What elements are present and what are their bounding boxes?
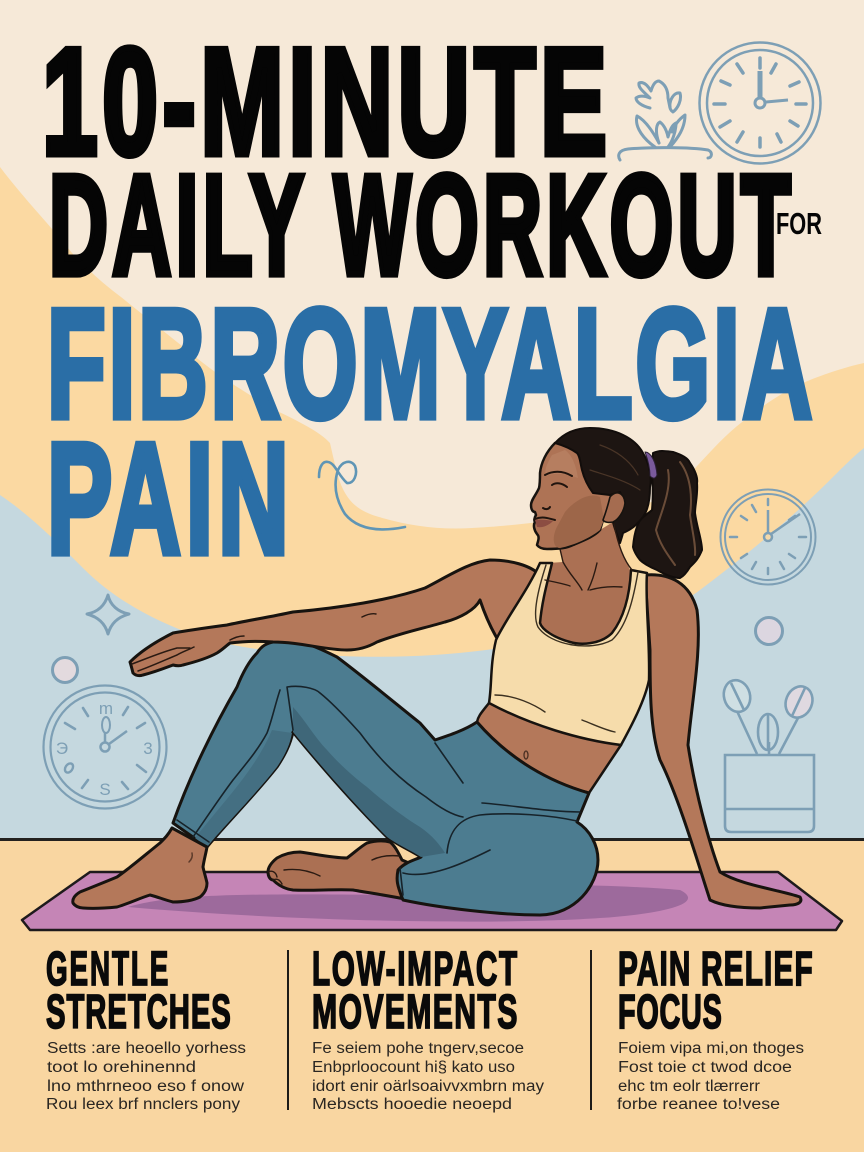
divider <box>287 950 289 1110</box>
foot: tucked <box>268 841 425 900</box>
heading: FOCUS <box>618 986 722 1039</box>
heading: MOVEMENTS <box>312 986 517 1039</box>
supporting arm <box>645 575 801 908</box>
ear <box>603 493 625 522</box>
heading: PAIN RELIEF <box>618 943 813 996</box>
forehead highlight <box>545 450 578 478</box>
neck lines and collarbones <box>545 524 632 590</box>
description: idort enir oärlsoaivvxmbrn may <box>312 1078 544 1095</box>
icon: right small circle <box>756 618 782 644</box>
title line 2: DAILY WORKOUT <box>49 145 791 305</box>
icon: wall clock top right <box>700 42 820 164</box>
divider <box>590 950 592 1110</box>
heading <box>46 942 231 1039</box>
ankle crease <box>189 853 192 862</box>
heading: GENTLE <box>46 942 168 996</box>
leggings shading <box>293 707 445 857</box>
ponytail <box>633 451 702 578</box>
icon: swirl <box>319 462 405 529</box>
description: Mebscts hooedie neoepd <box>312 1096 512 1113</box>
description: Fost toie ct twod dcoe <box>618 1059 792 1076</box>
description <box>46 1040 246 1113</box>
title line 3: FIBROMYALGIA <box>47 278 812 451</box>
icon: left small circle <box>52 658 78 682</box>
foot: left <box>73 828 207 908</box>
fingers and elbow crease <box>132 614 376 671</box>
figure: woman seated and stretching <box>73 428 801 915</box>
neck and chest <box>535 522 645 670</box>
description <box>617 1040 804 1113</box>
yoga mat <box>22 872 842 930</box>
heading: LOW-IMPACT <box>312 943 517 996</box>
column: low-impact movements <box>312 943 544 1113</box>
toes <box>268 856 400 884</box>
heading: STRETCHES <box>46 986 231 1039</box>
icon: vase with plant stems <box>720 677 817 832</box>
leggings <box>173 640 598 915</box>
lips <box>535 520 553 527</box>
title line 4: PAIN <box>47 410 289 587</box>
clock numerals <box>56 699 153 799</box>
icon: sparkle <box>87 595 129 634</box>
description: lno mthrneoo eso f onow <box>47 1078 245 1095</box>
clock numerals: S <box>99 780 111 799</box>
icon: right wall clock <box>720 490 816 584</box>
ponytail highlights <box>656 462 695 565</box>
facial features <box>535 472 572 520</box>
clock numerals: m <box>99 699 113 718</box>
face <box>531 440 625 549</box>
description: Enbprloocount hi§ kato uso <box>312 1059 515 1076</box>
description: toot lo orehinennd <box>47 1059 196 1076</box>
facial shading <box>554 495 604 548</box>
icon: left wall clock <box>44 686 166 808</box>
description: forbe reanee to!vese <box>617 1096 780 1113</box>
navel <box>524 751 528 759</box>
title word: for: FOR <box>776 206 822 241</box>
midriff <box>477 703 621 793</box>
heading <box>312 943 517 1039</box>
hair <box>555 428 651 543</box>
leggings seams <box>177 686 580 895</box>
icon: plant on shelf <box>619 81 711 160</box>
tank top neckline and folds <box>495 565 638 732</box>
description: ehc tm eolr tlærrerr <box>618 1078 760 1095</box>
title line 1: 10-MINUTE <box>42 17 607 187</box>
column: gentle stretches <box>46 942 246 1113</box>
clock numerals: 3 <box>143 739 153 758</box>
description <box>312 1040 544 1113</box>
column: pain relief focus <box>617 943 813 1113</box>
hair tie <box>645 452 657 478</box>
shin shading <box>195 730 292 847</box>
description: Setts :are heoello yorhess <box>47 1040 246 1057</box>
description: Rou leex brf nnclers pony <box>46 1096 240 1113</box>
clock numerals: Э <box>56 739 68 758</box>
hair sheen <box>590 445 640 490</box>
tank top <box>489 563 649 745</box>
description: Fe seiem pohe tngerv,secoe <box>312 1040 524 1057</box>
description: Foiem vipa mi,on thoges <box>618 1040 804 1057</box>
extended arm <box>130 560 540 676</box>
heading <box>618 943 813 1039</box>
